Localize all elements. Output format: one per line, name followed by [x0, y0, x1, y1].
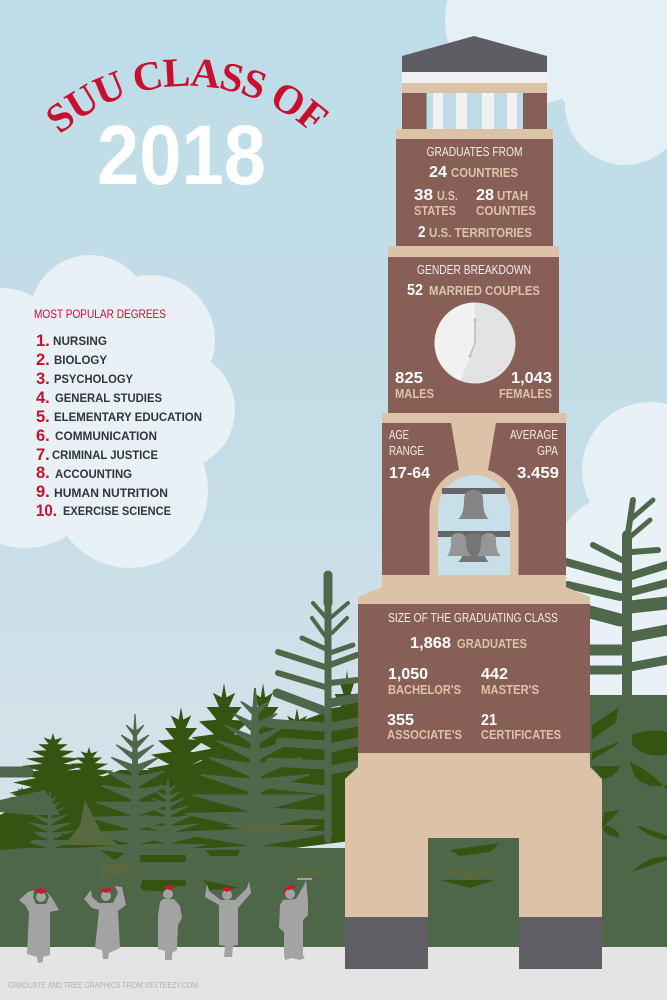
degree list: NURSING	[53, 334, 107, 348]
graduate 2	[84, 886, 126, 959]
degree list: 1.	[36, 332, 50, 350]
panel: graduates from: 38	[414, 187, 433, 204]
panel: size of the graduating class: ASSOCIATE'S	[387, 728, 462, 742]
panel: graduates from: 2	[418, 224, 426, 241]
panel: graduates from: 24	[429, 164, 447, 181]
title arc: SUU CLASS OF: SUU CLASS OF	[47, 59, 330, 133]
panel: age and gpa with belfry arch	[382, 423, 566, 575]
panel: gender breakdown: FEMALES	[499, 387, 552, 401]
tower base block with opening	[345, 753, 602, 918]
forest: dark back trees	[0, 670, 385, 860]
tier ledge 1	[396, 129, 553, 139]
belfry columns	[402, 93, 547, 129]
degree list: CRIMINAL JUSTICE	[52, 448, 158, 462]
degree list: EXERCISE SCIENCE	[63, 504, 171, 518]
panel: graduates from: U.S.	[437, 189, 458, 203]
panel: gender breakdown: 825	[395, 370, 423, 387]
panel: gender breakdown: MALES	[395, 387, 434, 401]
panel: size of the graduating class: 355	[387, 712, 414, 729]
panel: graduates from: 28	[476, 187, 494, 204]
degree list: 5.	[36, 408, 50, 426]
tower roof	[402, 36, 547, 72]
degree list: 3.	[36, 370, 50, 388]
cloud: right behind tree	[553, 402, 667, 705]
footer credit: GRADUATE AND TREE GRAPHICS FROM VEXTEEZY.COM	[8, 981, 198, 990]
panel: age and gpa with belfry arch: 17-64	[389, 465, 430, 482]
panel: graduates from: COUNTIES	[476, 204, 536, 218]
forest: ground fill	[0, 695, 667, 948]
degree list: ELEMENTARY EDUCATION	[54, 410, 202, 424]
degree list: ACCOUNTING	[55, 467, 132, 481]
ground	[0, 947, 667, 1000]
white frieze	[402, 72, 547, 83]
panel: size of the graduating class: MASTER'S	[481, 683, 539, 697]
panel: size of the graduating class: BACHELOR'S	[388, 683, 461, 697]
cloud: degrees panel background	[0, 255, 235, 568]
degree list: PSYCHOLOGY	[54, 372, 133, 386]
belfry cap	[402, 83, 547, 93]
panel: size of the graduating class: SIZE OF THE GRADUATING CLASS	[388, 611, 558, 625]
panel: size of the graduating class	[358, 604, 590, 753]
panel: gender breakdown: 52	[407, 282, 423, 299]
degree list: 7.	[36, 446, 50, 464]
graduate 1	[19, 888, 59, 963]
belfry sky opening	[426, 93, 524, 129]
degrees heading: MOST POPULAR DEGREES	[34, 307, 166, 321]
degree list: 4.	[36, 389, 50, 407]
clock pie chart	[434, 302, 516, 384]
tier ledge 3	[382, 413, 566, 423]
panel: size of the graduating class: CERTIFICATES	[481, 728, 561, 742]
panel: size of the graduating class: 442	[481, 666, 508, 683]
degree list: HUMAN NUTRITION	[54, 486, 168, 500]
tower shoulder	[358, 575, 590, 604]
panel: age and gpa with belfry arch: AVERAGE	[510, 428, 558, 442]
graduates	[19, 878, 312, 963]
degree list: 6.	[36, 427, 50, 445]
panel: gender breakdown: GENDER BREAKDOWN	[417, 263, 531, 277]
panel: size of the graduating class: 1,868	[410, 635, 451, 652]
panel: gender breakdown: 1,043	[511, 370, 552, 387]
degree list: COMMUNICATION	[55, 429, 157, 443]
panel: graduates from: GRADUATES FROM	[426, 145, 522, 159]
tree: tall tree right of tower	[566, 500, 667, 700]
panel: graduates from	[396, 139, 553, 246]
panel: size of the graduating class: 21	[481, 712, 497, 729]
panel: age and gpa with belfry arch: 3.459	[517, 465, 559, 482]
degree list: 2.	[36, 351, 50, 369]
degree list: 8.	[36, 464, 50, 482]
forest: front trees	[0, 688, 341, 870]
panel: graduates from: UTAH	[497, 189, 528, 203]
panel: size of the graduating class: GRADUATES	[457, 637, 527, 651]
panel: graduates from: COUNTRIES	[451, 166, 518, 180]
panel: age and gpa with belfry arch: GPA	[537, 444, 559, 458]
forest: dark and olive patches	[0, 708, 667, 892]
panel: age and gpa with belfry arch: RANGE	[389, 444, 424, 458]
degree list: 10.	[36, 502, 57, 520]
title year: 2018: 2018	[97, 108, 266, 202]
tier ledge 2	[388, 246, 559, 257]
graduate 3	[158, 885, 182, 960]
panel: graduates from: STATES	[414, 204, 456, 218]
degree list: BIOLOGY	[54, 353, 107, 367]
panel: age and gpa with belfry arch: AGE	[389, 428, 409, 442]
panel: most popular degrees	[34, 307, 202, 520]
tower foot blocks	[345, 917, 602, 969]
tree: tall tree left of tower	[265, 575, 357, 840]
degree list: GENERAL STUDIES	[55, 391, 162, 405]
degree list: 9.	[36, 483, 50, 501]
panel: size of the graduating class: 1,050	[388, 666, 428, 683]
panel: gender breakdown	[388, 257, 559, 413]
graduate 4	[205, 881, 251, 957]
bells	[438, 488, 510, 562]
arch surround	[430, 423, 518, 576]
graduate 5	[279, 878, 312, 960]
bell tower	[345, 36, 602, 918]
degree list	[36, 332, 202, 520]
panel: graduates from: U.S. TERRITORIES	[429, 226, 532, 240]
panel: gender breakdown: MARRIED COUPLES	[429, 284, 540, 298]
arch opening	[438, 475, 510, 575]
cloud: top right	[445, 0, 667, 165]
